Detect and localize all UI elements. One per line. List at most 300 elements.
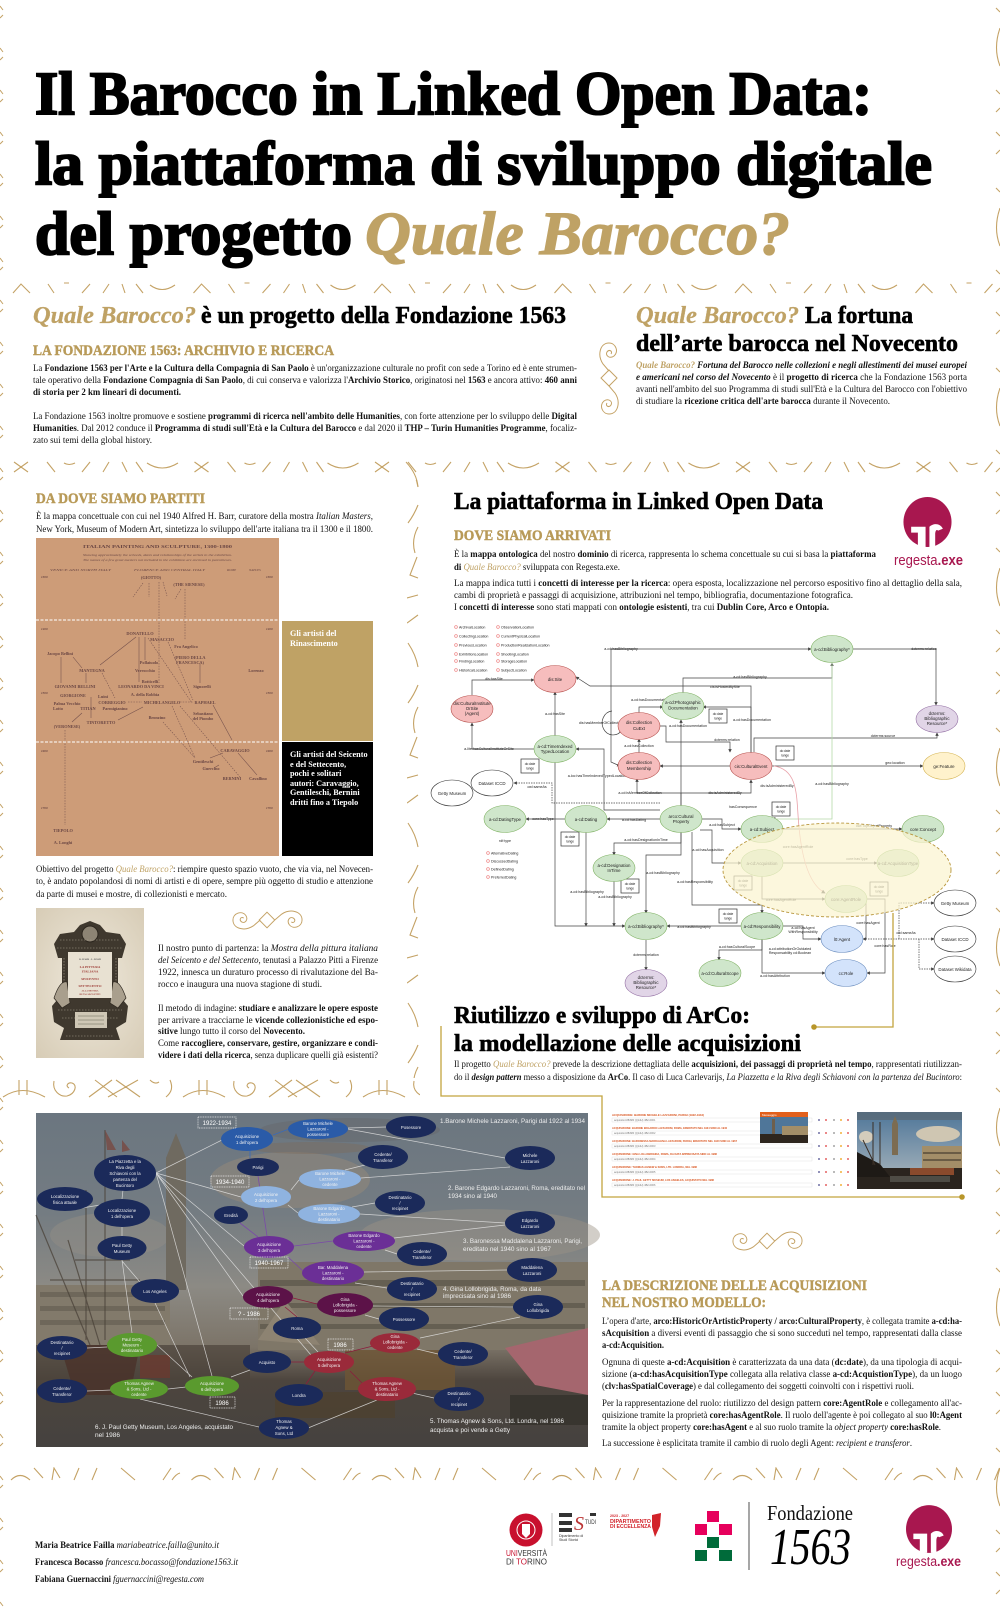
node: Los Angeles: Los Angeles — [143, 1289, 167, 1294]
chart: Barr map of Italian art: Gentileschi — [193, 759, 214, 764]
range boxes: range — [777, 810, 785, 814]
title: del progetto — [35, 201, 352, 268]
image: 1922 exhibition catalogue cover: SEICENTO — [81, 977, 99, 981]
node: Getty Museum right: Getty Museum — [941, 901, 970, 906]
edge labels: core:hasType — [846, 857, 868, 861]
edge labels: a-cd:isMemberOfCollection — [618, 791, 662, 795]
text: model description: (clv:hasSpatialCoverage) e dal collegamento dei soggetti coinvolti con i rispettivi ruoli. — [602, 1381, 914, 1392]
box: Baroque artists: dritti fino a Tiepolo — [290, 798, 358, 807]
edge labels: a-cd:hasBibliography — [598, 895, 632, 899]
node: Thomas Agnew destinatario: destinatario — [376, 1392, 399, 1397]
node: AcquisitionType: a-cd:AcquisitionType — [878, 861, 919, 866]
node: Barone Michele possessore: Lazzaroni - — [307, 1126, 329, 1132]
node: Getty Museum right — [934, 890, 976, 916]
annotations: 1.Barone Michele Lazzaroni, Parigi dal 1922 al 1934 — [440, 1118, 586, 1125]
chart: Barr map of Italian art: LEONARDO DA VINCI — [118, 684, 164, 689]
heading: la fortuna — [636, 303, 958, 357]
legend: location subclasses: CollectingLocation — [459, 634, 488, 638]
legend: location subclasses: rdf:type — [499, 839, 511, 843]
range boxes: dc:date — [780, 749, 790, 753]
node: Acquisizione 4: 4 dell'opera — [257, 1298, 280, 1303]
node: Cedente 3: Cedente/ — [454, 1349, 473, 1354]
chart: Barr map of Italian art: Fra Angelico — [174, 644, 198, 649]
footer: authors: Maria Beatrice Failla mariabeatrice.failla@unito.it — [35, 1540, 219, 1551]
node: Subject — [741, 816, 783, 842]
painting: Carlevarijs, La Piazzetta — [857, 1112, 962, 1189]
title: Il Barocco in Linked Open Data: — [35, 61, 872, 128]
text: ontology map description — [454, 548, 962, 613]
chart: Barr map of Italian art: 1500 — [266, 691, 273, 695]
node: CollectionCuExt: CuExt — [633, 726, 646, 731]
node: Parigi: Parigi — [252, 1165, 264, 1170]
node: Gina possessore: Lollobrigida - — [333, 1302, 358, 1308]
logo: Università di Torino: UNIVERSITÀ — [506, 1549, 548, 1558]
node: Cedente 2: Transferor — [412, 1255, 432, 1260]
node: Cedente 4 — [37, 1379, 87, 1403]
heading: platform: La piattaforma in Linked Open Data — [454, 489, 823, 515]
range boxes: range — [875, 890, 883, 894]
node: Gina possessore: Gina — [340, 1297, 350, 1302]
heading: ArCo reuse: Riutilizzo e sviluppo di ArCo: — [454, 1003, 750, 1029]
text: project objective — [36, 864, 373, 900]
legend: location subclasses: PreviousLocation — [459, 644, 487, 648]
chart: Barr map of Italian art: DONATELLO — [126, 631, 154, 636]
node: Acquisizione 5: 5 dell'opera — [318, 1363, 341, 1368]
chart: Barr map of Italian art: Jacopo Bellini — [47, 651, 74, 656]
node: core:AgentRole: core:AgentRole — [831, 897, 862, 902]
legend: location subclasses: HistoricalLocation — [459, 668, 487, 672]
text: project objective: to, è andato popolandosi di nomi di artisti e di opere, sempre più oggetto di studio e attenzione — [36, 876, 373, 887]
text: foundation description: tale operativo della Fondazione Compagnia di San Paolo, di cui conserva e valorizza l'Archivio Storico, originatosi nel 1563 e ancora attivo: 460 anni — [33, 375, 577, 386]
node: Acquisizione 2: 2 dell'opera — [255, 1198, 278, 1203]
legend: location subclasses: FindingLocation — [459, 660, 484, 664]
node: Dataset Wikidata: Dataset Wikidata — [938, 967, 972, 972]
legend: location subclasses: StorageLocation — [501, 660, 527, 664]
ornament: vertical swirl — [600, 343, 618, 414]
node: Barone Michele possessore: Barone Michele — [303, 1121, 334, 1126]
chart: Barr map of Italian art: TIEPOLO — [53, 828, 73, 833]
node: Acquisizione 3 — [244, 1236, 294, 1258]
text: research project — [636, 360, 968, 407]
node: cc:Role — [825, 960, 867, 986]
edge labels: hasConsequence — [729, 805, 757, 809]
logo: Dipartimento di Studi Storici: Dipartimento di — [559, 1534, 583, 1538]
node: Acquisizione 6 — [185, 1376, 239, 1396]
chart: Barr map of Italian art: Guercino — [202, 766, 220, 771]
node: DatingType — [484, 806, 526, 832]
date labels: ? - 1986 — [238, 1312, 261, 1318]
panel: la descrizione delle acquisizioni — [602, 1278, 963, 1449]
node: Acquisizione 2: Acquisizione — [254, 1192, 279, 1197]
chart: Barr map of Italian art: RAPHAEL — [194, 700, 216, 705]
subheading: archive and research: LA FONDAZIONE 1563: ARCHIVIO E RICERCA — [33, 343, 334, 359]
chart: Barr map of Italian art: 1600 — [41, 749, 48, 753]
node: Designation: InTime — [607, 868, 621, 873]
chart: Barr map of Italian art: Sebastiano — [193, 711, 213, 716]
chart: Barr map of Italian art: Pollaiuolo — [140, 660, 158, 665]
node: PhotographicDocumentation: a-cd:Photographic — [665, 700, 702, 705]
chart: Barr map of Italian art: Parmigianino — [102, 706, 128, 711]
node: Localizzazione 1: 1 dell'opera — [111, 1214, 134, 1219]
legend: location subclasses: DiscussedDating — [491, 860, 518, 864]
text: starting point and method — [158, 943, 379, 1061]
node: CulturalScope: a-cd:CulturalScope — [701, 971, 739, 976]
edge labels: a-cd:hasDocumentation — [733, 718, 771, 722]
node: CulturalInstituteOrSite: (Agent) — [465, 711, 480, 716]
box: Baroque artists: Gli artisti del Seicento — [290, 750, 368, 759]
node: l0:Agent: l0:Agent — [834, 937, 851, 942]
chart: Barr map of Italian art: 1500 — [41, 691, 48, 695]
node: Barone Michele cedente: cedente — [322, 1182, 338, 1187]
text: starting point and method: Il metodo di indagine: studiare e analizzare le opere esposte — [158, 1003, 379, 1014]
text: research project: avanti nell'ambito del suo Programma di studi sull'Età e la Cultura del Barocco con l'obiettivo — [636, 384, 967, 395]
node: ge:Feature — [923, 752, 965, 780]
text: research project: Quale Barocco? Fortuna del Barocco nelle collezioni e negli allestimenti dei musei europei — [636, 360, 967, 371]
text: research project: di studiare la ricezione critica dell'arte barocca durante il Novecento. — [636, 396, 890, 407]
chart: acquisition network over painting — [36, 1113, 600, 1447]
node: Bibliography bottom: a-cd:Bibliography* — [628, 924, 664, 929]
node: Barone Michele cedente: Lazzaroni - — [319, 1176, 341, 1182]
node: Paul Getty destinatario — [107, 1333, 157, 1357]
edge labels: dcterms:relation — [911, 647, 937, 651]
node: Gina Lollobrigida — [513, 1295, 563, 1319]
node: Los Angeles — [131, 1279, 179, 1303]
title: la piattaforma di sviluppo digitale — [35, 131, 932, 198]
logo: Dipartimento di eccellenza: 2023 - 2027 — [610, 1514, 629, 1518]
chart: Barr map of Italian art: 1400 — [266, 627, 273, 631]
edge labels: a-cd:hasDating — [622, 818, 646, 822]
node: Designation: a-cd:Designation — [598, 863, 631, 868]
edge labels: dis:isAdministeredBy — [760, 784, 794, 788]
legend: location subclasses: ProductionRealizationLocation — [501, 644, 550, 648]
panel: la piattaforma in Linked Open Data — [431, 489, 976, 996]
node: CulturalProperty: arco:Cultural — [669, 814, 693, 819]
text: Barr map intro: New York, Museum of Modern Art, sintetizza lo sviluppo dell'arte italiana tra il 1300 e il 1800. — [36, 524, 373, 535]
logo: regesta.exe — [894, 497, 963, 569]
text: ontology map description: È la mappa ontologica del nostro dominio di ricerca, rappresenta lo schema concettuale su cui si basa la piattaforma — [454, 548, 876, 560]
node: Responsibility: a-cd:Responsibility — [744, 924, 781, 929]
date labels: 1986 — [333, 1343, 347, 1349]
node: Ereditá — [214, 1206, 248, 1224]
heading: project of the foundation — [33, 303, 566, 329]
logo: Dipartimento di eccellenza: DIPARTIMENTO — [610, 1519, 652, 1525]
node: Cedente 4: Cedente/ — [53, 1386, 72, 1391]
node: Acquisto — [243, 1351, 291, 1373]
node: CollectionMembership — [618, 752, 660, 780]
node: Gina cedente: Lollobrigida - — [383, 1340, 408, 1344]
node: Acquisizione 1 — [221, 1127, 273, 1151]
logo: Dipartimento di Studi Storici: TUDI — [585, 1520, 596, 1526]
edge labels: core:hasAgentRole — [783, 845, 813, 849]
node: Maddalena Lazzaroni: Maddalena — [521, 1265, 543, 1270]
chart: Barr map of Italian art: 1300 — [41, 575, 48, 579]
node: core:Concept — [902, 816, 944, 842]
ornament: swirl above description — [733, 1232, 802, 1250]
text: research project: e americani nel corso del Novecento è il progetto di ricerca che la Fondazione 1563 porta — [636, 372, 968, 383]
node: Localizzazione 1: Localizzazione — [108, 1208, 137, 1213]
node: Destinatario 2: / — [411, 1286, 413, 1292]
image: painting background — [36, 1113, 600, 1447]
node: l0:Agent — [821, 926, 863, 952]
node: Destinatario 3: Destinatario — [51, 1340, 74, 1345]
chart: Barr map of Italian art: FRANCESCA) — [176, 660, 205, 665]
node: Acquisizione 4 — [243, 1286, 293, 1308]
chart: Barr map of Italian art: The names of a few great masters not included in the exhibition are enclosed in parentheses. — [83, 558, 232, 562]
screenshot: platform acquisition list: acquisition/f8d9f0 (Q1dH) 4B2-0006 — [614, 1183, 656, 1187]
screenshot: platform acquisition list — [612, 1112, 962, 1189]
chart: Barr map of Italian art: VENICE AND NORTH ITALY — [50, 568, 113, 572]
text: starting point and method: videre i dati della ricerca, senza duplicare quelli già esistenti? — [158, 1050, 378, 1061]
text: model description: sAcquisition a diversi eventi di passaggio che si sono succeduti nel tempo, rappresentati dalla classe — [602, 1328, 962, 1339]
panel: da dove siamo partiti — [36, 491, 379, 1061]
box: Renaissance artists — [282, 621, 373, 741]
chart: Barr map of Italian art: ITALIAN PAINTING AND SCULPTURE, 1300-1800 — [83, 544, 232, 549]
node: Thomas Agnew cedente — [110, 1379, 168, 1399]
chart: Barr map of Italian art: MICHELANGELO — [144, 700, 181, 705]
highlight: acquisition area — [723, 823, 951, 917]
chart: Barr map of Italian art: CORREGGIO — [98, 700, 126, 705]
chart: Barr map of Italian art: Botticelli — [142, 679, 159, 684]
annotations — [95, 1118, 586, 1439]
node: Cedente 2: Cedente/ — [413, 1249, 432, 1254]
node: core:Concept: core:Concept — [910, 827, 937, 832]
subheading: acquisitions in our model: LA DESCRIZIONE DELLE ACQUISIZIONI — [602, 1278, 867, 1294]
edge labels: a-cd:hasBibliography — [815, 782, 849, 786]
node: CollectionCuExt: dis:Collection — [626, 720, 653, 725]
screenshot: platform acquisition list: acquisition/f8d9f0 (Q1dH) 4B2-0005 — [614, 1170, 656, 1174]
edge labels: a-cd:hasCulturalScope — [719, 945, 755, 949]
edge labels: a-cd:hasSite — [545, 712, 565, 716]
node: La Piazzetta: Schiavoni con la — [109, 1171, 141, 1176]
text: ontology map description: I concetti di interesse sono stati mappati con ontologie esistenti, tra cui Dublin Core, Arco e Ontopia. — [454, 602, 829, 613]
date labels: 1940-1967 — [255, 1261, 284, 1267]
node: Thomas Agnew: Agnew & — [275, 1425, 293, 1430]
chart: Barr map of Italian art — [36, 538, 279, 856]
node: Cedente 1: Cedente/ — [374, 1152, 393, 1157]
edge labels: owl:sameAs — [527, 785, 547, 789]
node: core:AgentRole — [825, 886, 867, 912]
text: model description: quisizione tramite la proprietà core:hasAgentRole. Il ruolo dell'agente è poi collegato al suo l0:Agent — [602, 1410, 963, 1421]
node: Possessore: Possessore — [393, 1317, 416, 1322]
node: CollectionMembership: dis:Collection — [626, 760, 653, 765]
node: Cedente 3: Transferor — [453, 1355, 473, 1360]
popup thumbnail: Messaggio — [762, 1113, 777, 1117]
annotations: 6. J. Paul Getty Museum, Los Angeles, acquistato — [95, 1424, 234, 1431]
box: Baroque artists — [282, 742, 373, 856]
chart: ontology graph — [431, 626, 976, 996]
logo: Dipartimento di eccellenza — [610, 1513, 661, 1537]
screenshot: platform acquisition list: ACQUISIZIONE: BARONESSA MADDALENA LAZZARONI, PARIGI, EREDITATO NEL 1940 SINO AL 1967 — [612, 1139, 737, 1143]
chart: Barr map of Italian art: 1400 — [41, 627, 48, 631]
node: Barone Edgardo cedente: Barone Edgardo — [348, 1233, 380, 1238]
logo: Università di Torino — [506, 1514, 548, 1566]
node: CulturalInstituteOrSite — [451, 696, 493, 722]
heading: la fortuna: La fortuna — [805, 303, 913, 329]
text: model description — [602, 1316, 963, 1449]
annotations: 4. Gina Lollobrigida, Roma, da data — [443, 1286, 542, 1293]
text: project objective: Obiettivo del progetto Quale Barocco?: riempire questo spazio vuoto, che via via, nel Novecen- — [36, 864, 373, 875]
node: Edgardo Lazzaroni: Edgardo — [522, 1218, 539, 1223]
chart: Barr map of Italian art: GIOVANNI BELLINI — [55, 684, 96, 689]
chart: Barr map of Italian art: Lorenzo — [248, 668, 264, 673]
range boxes: dc:date — [723, 912, 733, 916]
box: Baroque artists: e del Settecento, — [290, 760, 346, 769]
node: Barone Edgardo cedente: Lazzaroni - — [353, 1238, 375, 1244]
range boxes: range — [739, 884, 747, 888]
edge labels: dcterms:source — [871, 734, 895, 738]
node: Dataset ICCD left — [471, 770, 513, 796]
edge labels: a-cd:hasSubject — [709, 823, 735, 827]
chart: Barr map of Italian art: TITIAN — [80, 706, 97, 711]
chart: Barr map of Italian art: MASACCIO — [150, 637, 175, 642]
range boxes — [521, 709, 888, 923]
node: Destinatario 2: recipinet — [404, 1292, 421, 1297]
text: starting point and method: 1922, innesca un duraturo processo di rivalutazione del Ba- — [158, 967, 378, 978]
screenshot: platform acquisition list: ACQUISIZIONE: BARONE MICHELE LAZZARONI, PARIGI (1922-1934) — [612, 1113, 704, 1117]
range boxes: dc:date — [874, 885, 884, 889]
text: starting point and method: Come raccogliere, conservare, gestire, organizzare e condi- — [158, 1038, 378, 1049]
node: Getty Museum left: Getty Museum — [438, 791, 467, 796]
chart: Barr map of Italian art: 1600 — [266, 749, 273, 753]
chart: Barr map of Italian art: A. della Robbia — [131, 692, 160, 697]
node: Bibliography bottom — [625, 912, 667, 940]
ornament: horizontal swirl — [233, 911, 302, 929]
edge labels: a-loc:hasTimeIndexedTypedLocation — [568, 774, 626, 778]
image: 1922 exhibition catalogue cover — [36, 908, 144, 1058]
annotations: 2. Barone Edgardo Lazzaroni, Roma, ereditato nel — [448, 1185, 585, 1192]
node: BibliographicResource top: dcterms: — [929, 711, 945, 716]
node: Barone Michele possessore — [288, 1119, 348, 1139]
node: Paul Getty destinatario: Paul Getty — [122, 1337, 143, 1342]
node: Barone Edgardo destinatario — [298, 1204, 360, 1224]
text: model description: L’opera d'arte, arco:HistoricOrArtisticProperty / arco:CulturalProperty, è collegata tramite a-cd:ha- — [602, 1316, 962, 1327]
node: Dataset Wikidata — [934, 956, 976, 982]
node: BibliographicResource bottom: Resource* — [636, 985, 657, 990]
network edges — [82, 1127, 520, 1428]
popup thumbnail — [760, 1112, 808, 1143]
node: cc:Role: cc:Role — [839, 971, 854, 976]
node: Barone Edgardo cedente: cedente — [356, 1244, 372, 1249]
node: Barone Michele cedente — [299, 1169, 361, 1189]
node: Paul Getty Museum — [98, 1236, 146, 1260]
edge labels: geo:location — [885, 761, 905, 765]
text: model description: tramite la object property core:hasAgent e al suo ruolo tramite la object property core:hasRole. — [602, 1422, 941, 1433]
node: Possessore — [379, 1307, 429, 1331]
node: TimeIndexedTypedLocation — [534, 736, 576, 762]
text: Barr map intro — [36, 510, 373, 535]
footer: authors: Francesca Bocasso francesca.bocasso@fondazione1563.it — [35, 1557, 238, 1568]
node: Acquisizione 6: 6 dell'opera — [201, 1387, 224, 1392]
node: BibliographicResource top: Bibliographic — [924, 716, 950, 721]
text: project objective: da parte di musei e mostre, di collezionisti e mercato. — [36, 889, 227, 900]
date labels: 1922-1934 — [203, 1121, 232, 1127]
node: Gina possessore: possessore — [334, 1308, 357, 1313]
text: model description: a-cd:Acquisition. — [602, 1340, 664, 1351]
chart: Barr map of Italian art: CARAVAGGIO — [220, 748, 250, 753]
screenshot: platform acquisition list: acquisition/f8d9f0 (Q1dH) 4B2-0001 — [614, 1118, 656, 1122]
chart: Barr map of Italian art: A. Longhi — [54, 840, 73, 845]
node: La Piazzetta — [94, 1155, 156, 1191]
logo: Dipartimento di Studi Storici — [552, 1513, 596, 1546]
node: Cedente 4: Transferor — [52, 1392, 72, 1397]
heading: la fortuna: Quale Barocco? — [636, 303, 799, 329]
node: CollectionCuExt — [618, 712, 660, 740]
edge labels: a-cd:hasDesignationInTime — [624, 838, 668, 842]
date labels: 1934-1940 — [216, 1180, 245, 1186]
node: Thomas Agnew cedente: cedente — [131, 1392, 147, 1397]
edge labels: a-cd:hasBibliography — [604, 647, 638, 651]
logo: Fondazione 1563: Fondazione — [767, 1501, 853, 1525]
box: Baroque artists: autori: Caravaggio, — [290, 779, 359, 788]
chart: Barr map of Italian art: TINTORETTO — [87, 720, 116, 725]
screenshot: platform acquisition list: ACQUISIZIONE: GINA LOLLOBRIGIDA, ROMA, DA DATA IMPRECISATA SINO AL 1986 — [612, 1152, 717, 1156]
chart: Barr map of Italian art: Verrocchio — [135, 668, 155, 673]
node: Edgardo Lazzaroni: Lazzaroni — [521, 1224, 539, 1229]
node: Cedente 2 — [397, 1242, 447, 1266]
node: PhotographicDocumentation: Documentation — [668, 706, 698, 710]
image: 1922 exhibition catalogue cover: ITALIANA — [82, 970, 99, 974]
logo: Fondazione 1563 — [695, 1501, 853, 1576]
heading: la fortuna: dell’arte barocca nel Novecento — [636, 331, 958, 357]
legend: location subclasses: PreferredDating — [491, 876, 516, 880]
box: Renaissance artists: Gli artisti del — [290, 629, 337, 638]
screenshot: platform acquisition list: ACQUISIZIONE: THOMAS AGNEW & SONS, LTD. LONDRA, NEL 1986 — [612, 1165, 697, 1169]
logo: Fondazione 1563: 1563 — [770, 1519, 851, 1576]
image: 1922 exhibition catalogue cover: ALLA MOSTRA — [82, 990, 99, 992]
text: foundation description: di storia per 2 km lineari di documenti. — [33, 387, 181, 398]
node: BibliographicResource bottom: Bibliographic — [633, 980, 659, 985]
node: Maddalena destinatario — [302, 1261, 364, 1285]
text: starting point and method: Il nostro punto di partenza: la Mostra della pittura italiana — [158, 943, 378, 954]
node: Acquisizione 3: Acquisizione — [257, 1242, 282, 1247]
image: 1922 exhibition catalogue cover: SETTECENTO — [79, 984, 102, 988]
node: Dataset ICCD right: Dataset ICCD — [941, 937, 969, 942]
node: TimeIndexedTypedLocation: TypedLocation — [541, 749, 570, 754]
edge labels: owl:sameAs — [896, 931, 916, 935]
legend: location subclasses: SubjectLocation — [501, 668, 527, 672]
node: BibliographicResource bottom: dcterms: — [638, 975, 654, 980]
node: PhotographicDocumentation — [662, 692, 704, 720]
node: Gina Lollobrigida: Lollobrigida — [527, 1308, 550, 1313]
chart: Barr map of Italian art: GIORGIONE — [60, 693, 86, 698]
node: Gina Lollobrigida: Gina — [533, 1302, 543, 1307]
text: ArCo intro: do il design pattern messo a disposizione da ArCo. Il caso di Luca Carlevarijs, La Piazzetta e la Riva degli Schiavoni con la partenza del Bucintoro: — [454, 1072, 962, 1083]
node: Barone Michele cedente: Barone Michele — [315, 1171, 346, 1176]
chart: Barr map of Italian art: Lotto — [53, 706, 63, 711]
node: Acquisto: Acquisto — [259, 1360, 276, 1365]
chart: Barr map of Italian art: Cavallino — [249, 776, 267, 781]
text: ArCo intro — [454, 1059, 962, 1083]
range boxes: range — [724, 916, 732, 920]
range boxes: range — [781, 754, 789, 758]
box: Renaissance artists: Rinascimento — [290, 639, 338, 648]
edge labels: a-cd:hasDocumentation — [669, 724, 707, 728]
edge labels: a-cd:hasDocumentation — [631, 698, 669, 702]
range boxes: dc:date — [738, 879, 748, 883]
node: Paul Getty destinatario: Museum - — [122, 1342, 142, 1348]
logo: Dipartimento di Studi Storici: S — [574, 1513, 584, 1535]
node: Michele Lazzaroni — [505, 1146, 555, 1170]
connector: ArCo frame to screenshot — [441, 1026, 965, 1200]
chart: Barr map of Italian art: Signorelli — [193, 684, 212, 689]
node: Localizzazione fisica: fisica attuale — [53, 1200, 78, 1205]
node: Thomas Agnew destinatario: Thomas Agnew — [372, 1381, 403, 1386]
node: Dataset ICCD left: Dataset ICCD — [478, 781, 506, 786]
edge labels: a-cd:hasResponsibility — [677, 880, 713, 884]
edge labels: a-cd:hasAgent — [791, 926, 815, 930]
node: Destinatario 4: recipinet — [451, 1402, 468, 1407]
text: model description: La successione è esplicitata tramite il cambio di ruolo degli Agent: recipient e transferor. — [602, 1438, 912, 1449]
